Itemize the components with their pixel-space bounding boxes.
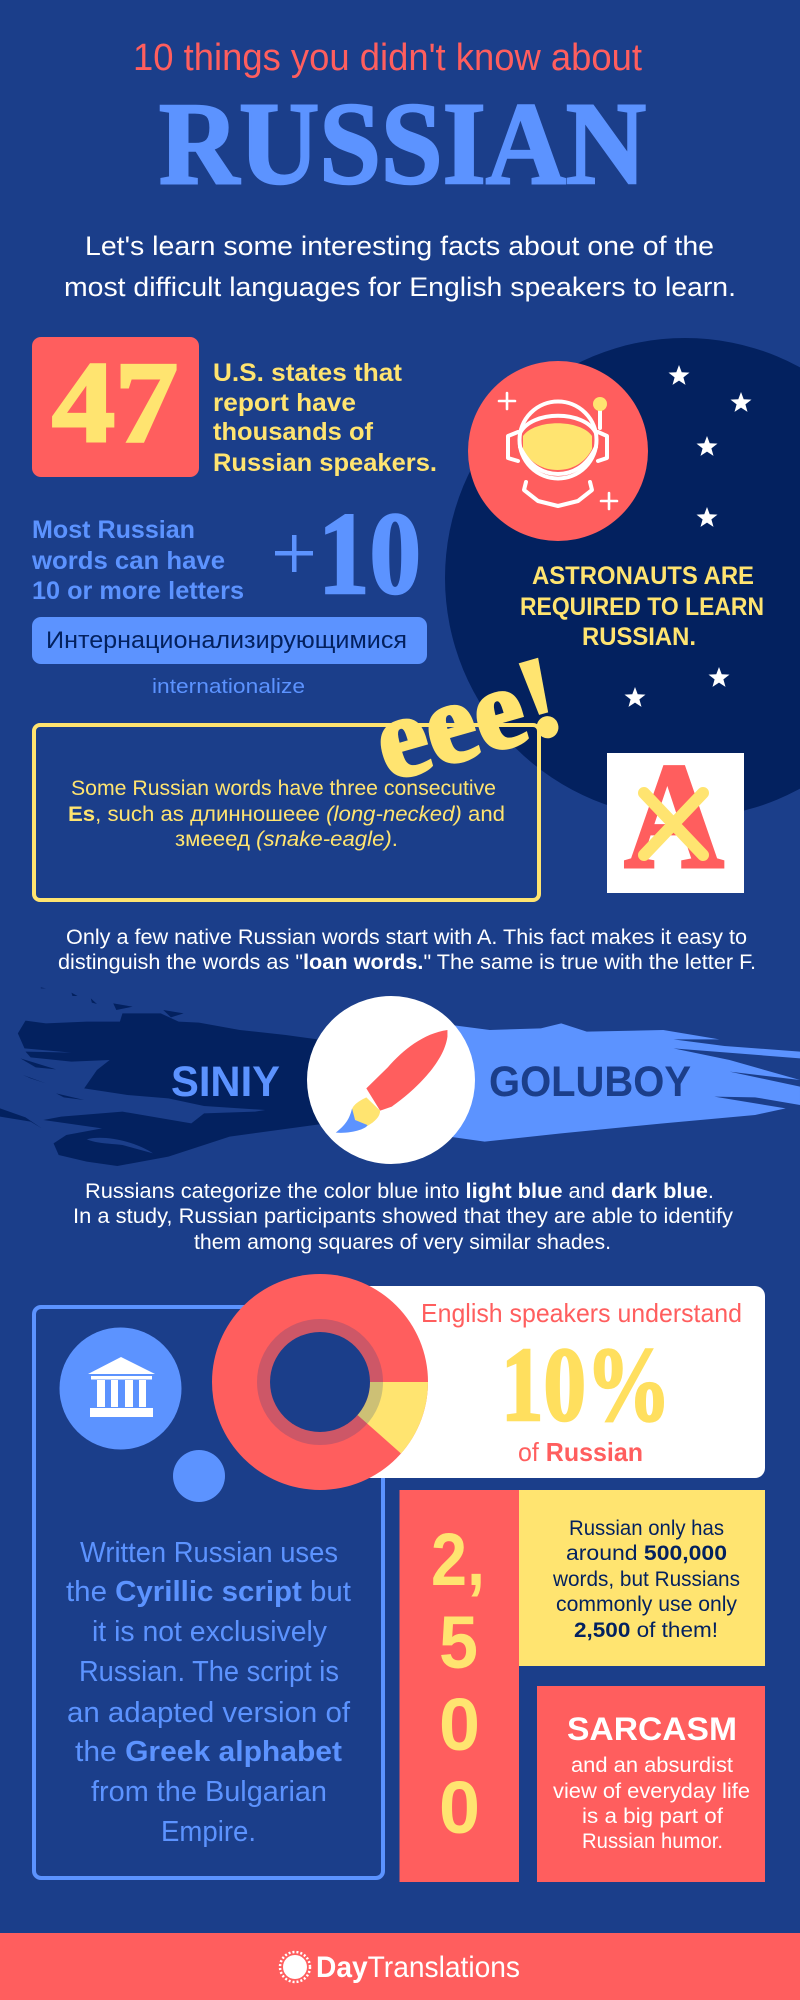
loan words text: distinguish the words as " loan words." The same is true with the letter F. [58, 951, 756, 974]
2,500 digits: 2, [431, 1518, 485, 1601]
loan words text [58, 926, 756, 974]
three Es text [68, 777, 505, 851]
three Es text: Some Russian words have three consecutive [71, 777, 496, 800]
blue shades text: Russians categorize the color blue into light blue and dark blue. [85, 1180, 714, 1203]
47 description: U.S. states that [213, 359, 403, 387]
donut chart [212, 1274, 428, 1490]
red column [400, 1490, 519, 1882]
plus ten figure: 10 [318, 488, 421, 619]
Cyrillic text [66, 1537, 351, 1848]
stars [624, 365, 752, 707]
long words text: 10 or more letters [32, 577, 244, 605]
panel: 47 states [32, 337, 437, 477]
light brush stroke [449, 1023, 800, 1142]
title main word: RUSSIAN [159, 78, 646, 209]
panel: 2,500 words [400, 1490, 765, 1882]
footer [0, 1933, 800, 2000]
astronauts text: ASTRONAUTS ARE [532, 562, 754, 590]
blue shades text [73, 1180, 734, 1254]
long word pill [32, 617, 427, 664]
letter A: A [624, 732, 724, 900]
three Es text: змееед (snake-eagle) . [175, 828, 398, 851]
47 description: Russian speakers. [213, 449, 437, 477]
intro text: Let's learn some interesting facts about one of the [85, 231, 714, 261]
panel: long words [31, 488, 427, 698]
title [133, 37, 646, 209]
47 description: report have [213, 389, 356, 417]
astronauts text: RUSSIAN. [582, 623, 696, 651]
47 description [213, 359, 437, 477]
panel: ten percent [212, 1274, 765, 1490]
long words text: Most Russian [32, 516, 195, 544]
icon: astronaut helmet [468, 361, 648, 541]
label SINIY: SINIY [171, 1058, 280, 1106]
2,500 digits: 0 [439, 1766, 480, 1849]
sarcasm text: view of everyday life [553, 1780, 750, 1803]
Cyrillic text: the Cyrillic script but [66, 1576, 351, 1608]
long words text: words can have [31, 547, 225, 575]
Cyrillic text: it is not exclusively [92, 1616, 327, 1648]
panel: Cyrillic script [34, 1307, 383, 1878]
2,500 digits: 5 [439, 1601, 478, 1684]
panel: letter A card [607, 732, 744, 900]
three Es text: Es, such as длинношеее (long-necked) and [68, 803, 505, 826]
word count text: 2,500 of them! [574, 1619, 718, 1642]
47 badge [32, 337, 199, 477]
Cyrillic text: Empire. [161, 1816, 256, 1848]
sarcasm text [553, 1754, 750, 1853]
word count text: around 500,000 [566, 1542, 727, 1565]
word count text: commonly use only [556, 1593, 737, 1616]
Cyrillic text: Russian. The script is [79, 1656, 339, 1688]
word count text: Russian only has [569, 1517, 724, 1540]
translation: internationalize [152, 676, 305, 698]
panel: astronauts dark circle [445, 338, 800, 818]
2,500 digits [431, 1518, 485, 1849]
astronauts text: REQUIRED TO LEARN [520, 593, 764, 621]
icon: building [60, 1328, 182, 1450]
sarcasm text: and an absurdist [571, 1754, 733, 1777]
background cutout in dark stroke [87, 1138, 153, 1153]
intro text [64, 231, 736, 302]
yellow panel [519, 1490, 765, 1666]
blue shades text: In a study, Russian participants showed that they are able to identify [73, 1205, 734, 1228]
plus ten figure [275, 488, 421, 619]
long words text [31, 516, 244, 605]
logo text: DayTranslations [316, 1951, 520, 1984]
Cyrillic text: Written Russian uses [80, 1537, 338, 1569]
small circle [173, 1450, 225, 1502]
word count text [552, 1517, 740, 1642]
47 description: thousands of [213, 418, 374, 446]
panel: sarcasm [537, 1686, 765, 1882]
panel: three Es [34, 631, 575, 900]
number 47: 47 [52, 339, 178, 467]
Cyrillic text: an adapted version of [67, 1697, 351, 1729]
Cyrillic text: the Greek alphabet [75, 1736, 342, 1768]
astronauts text [520, 562, 764, 651]
eee exclamation: eee! [360, 631, 575, 805]
title kicker: 10 things you didn't know about [133, 37, 642, 79]
10 percent figure: 10% [501, 1326, 671, 1443]
loan words text: Only a few native Russian words start with A. This fact makes it easy to [66, 926, 747, 949]
2,500 digits: 0 [439, 1683, 480, 1766]
long Russian word: Интернационализирующимися [46, 627, 407, 654]
intro text: most difficult languages for English speakers to learn. [64, 272, 736, 302]
Cyrillic text: from the Bulgarian [91, 1776, 327, 1808]
crossed out mark [644, 793, 703, 855]
panel: blue shades [0, 987, 800, 1166]
word count text: words, but Russians [552, 1568, 740, 1591]
icon: paint brush [307, 996, 475, 1164]
sarcasm text: Russian humor. [582, 1830, 723, 1853]
sarcasm text: is a big part of [582, 1805, 723, 1828]
icon: logo [280, 1952, 310, 1982]
blue shades text: them among squares of very similar shades. [194, 1231, 611, 1254]
label GOLUBOY: GOLUBOY [489, 1058, 691, 1106]
dark brush stroke [0, 987, 327, 1166]
card heading: English speakers understand [421, 1298, 742, 1328]
of Russian: of Russian [518, 1437, 643, 1467]
white card [330, 1286, 765, 1478]
sarcasm heading: SARCASM [567, 1711, 737, 1747]
